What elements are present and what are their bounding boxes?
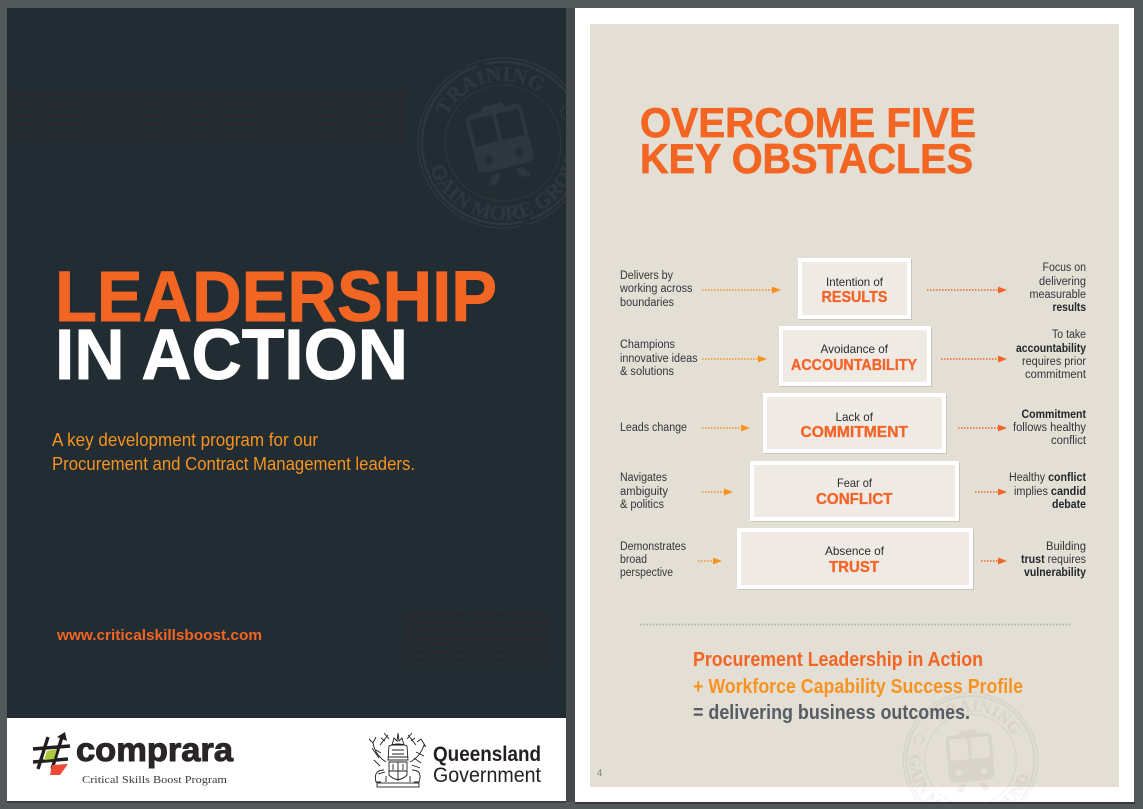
closing statement — [693, 649, 1023, 724]
arrow: right — [981, 558, 1007, 564]
arrow: right — [927, 286, 1007, 294]
dot pattern: top band — [7, 91, 404, 142]
heading: OVERCOME FIVE — [640, 99, 976, 146]
heading: KEY OBSTACLES — [640, 135, 973, 182]
stamp: training, gain more ground: GAIN MORE GROUND — [432, 154, 566, 220]
right label: debate — [1052, 499, 1086, 511]
heading — [640, 99, 976, 182]
closing statement: + Workforce Capability Success Profile — [693, 676, 1023, 698]
box: intention of results: RESULTS — [822, 289, 888, 306]
title: leadership in action: IN ACTION — [55, 316, 408, 395]
left label: & politics — [620, 499, 664, 511]
arrow: right — [975, 488, 1007, 496]
left label — [620, 541, 686, 579]
arrow: right — [941, 356, 1007, 362]
panel: cover page — [7, 8, 566, 801]
stamp: training, gain more ground — [418, 58, 566, 228]
arrow: left — [702, 286, 781, 294]
closing statement: Procurement Leadership in Action — [693, 649, 983, 671]
logo: comprara — [33, 731, 234, 786]
right label — [1009, 472, 1086, 511]
box: absence of trust: Absence of — [825, 544, 885, 558]
pyramid row: commitment — [620, 393, 1087, 454]
right label: vulnerability — [1024, 567, 1087, 579]
box: avoidance of accountability — [779, 326, 932, 387]
right label — [1016, 329, 1087, 381]
logo: comprara: comprara — [76, 731, 234, 768]
dot pattern: lower band — [403, 612, 550, 667]
logo: queensland government: Government — [433, 763, 541, 787]
footer strip — [7, 718, 566, 801]
arrow: left — [702, 356, 767, 362]
left label: Leads change — [620, 422, 687, 434]
right label: commitment — [1025, 369, 1087, 381]
box: avoidance of accountability: ACCOUNTABILITY — [791, 357, 918, 374]
right label: Healthy conflict — [1009, 472, 1086, 484]
left label — [620, 339, 698, 378]
right label: requires prior — [1022, 356, 1086, 368]
arrow: left — [702, 424, 750, 432]
left label: Navigates — [620, 472, 667, 484]
right label: measurable — [1030, 289, 1086, 301]
icon: comprara hash arrow — [33, 732, 70, 775]
right label: conflict — [1051, 435, 1087, 447]
box: intention of results: Intention of — [826, 275, 884, 289]
right label: implies candid — [1014, 486, 1086, 498]
box: absence of trust — [737, 528, 974, 590]
box: fear of conflict: Fear of — [837, 476, 873, 490]
right label — [1013, 409, 1087, 447]
stamp: faded watermark: TRAINING — [933, 700, 1020, 734]
pyramid row: conflict — [620, 461, 1086, 522]
right label: To take — [1052, 329, 1086, 341]
box: avoidance of accountability: Avoidance of — [820, 342, 889, 356]
right label: accountability — [1016, 343, 1087, 355]
right label: Building — [1046, 541, 1086, 553]
icon: coat of arms — [369, 733, 425, 787]
left label: ambiguity — [620, 486, 668, 498]
left label: boundaries — [620, 297, 674, 309]
website url: www.criticalskillsboost.com — [56, 627, 262, 644]
box: lack of commitment: COMMITMENT — [800, 424, 909, 441]
right label: follows healthy — [1013, 422, 1086, 434]
right label: results — [1052, 302, 1086, 314]
right label: Commitment — [1022, 409, 1086, 421]
arrow: left — [702, 488, 733, 496]
panel: overcome five key obstacles page — [575, 8, 1134, 802]
right label — [1030, 262, 1086, 314]
pyramid row: accountability — [620, 326, 1087, 387]
right label: delivering — [1039, 276, 1086, 288]
box: fear of conflict: CONFLICT — [816, 491, 893, 508]
pyramid row: results — [619, 258, 1086, 320]
box: fear of conflict — [750, 461, 960, 522]
box: absence of trust: TRUST — [829, 559, 880, 576]
arrow: left — [698, 558, 722, 564]
arrow: right — [958, 424, 1007, 432]
logo: queensland government — [369, 733, 541, 787]
right label: Focus on — [1042, 262, 1086, 274]
subtitle: Procurement and Contract Management leaders. — [52, 454, 415, 474]
title: leadership in action — [55, 258, 497, 395]
title: leadership in action: LEADERSHIP — [55, 258, 497, 337]
closing statement: = delivering business outcomes. — [693, 702, 970, 724]
stamp: faded watermark — [902, 692, 1038, 802]
left label: working across — [619, 283, 693, 295]
box: lack of commitment — [763, 393, 947, 454]
left label: perspective — [620, 567, 673, 579]
page number: 4 — [597, 768, 602, 779]
left label: Demonstrates — [620, 541, 686, 553]
subtitle: A key development program for our — [52, 430, 318, 450]
left label: & solutions — [620, 366, 674, 378]
left label: Delivers by — [620, 270, 673, 282]
left label: Champions — [620, 339, 675, 351]
box: intention of results — [798, 258, 912, 320]
subtitle — [52, 430, 415, 474]
box: lack of commitment: Lack of — [836, 410, 874, 424]
right label: trust requires — [1021, 554, 1086, 566]
left label: innovative ideas — [620, 353, 698, 365]
pyramid row: trust — [620, 528, 1087, 590]
right label — [1021, 541, 1087, 579]
logo: comprara: Critical Skills Boost Program — [82, 774, 227, 786]
left label — [619, 270, 693, 309]
stamp: training, gain more ground: TRAINING — [435, 67, 544, 114]
left label — [620, 472, 668, 511]
left label: broad — [620, 554, 647, 566]
logo: queensland government: Queensland — [433, 742, 541, 766]
